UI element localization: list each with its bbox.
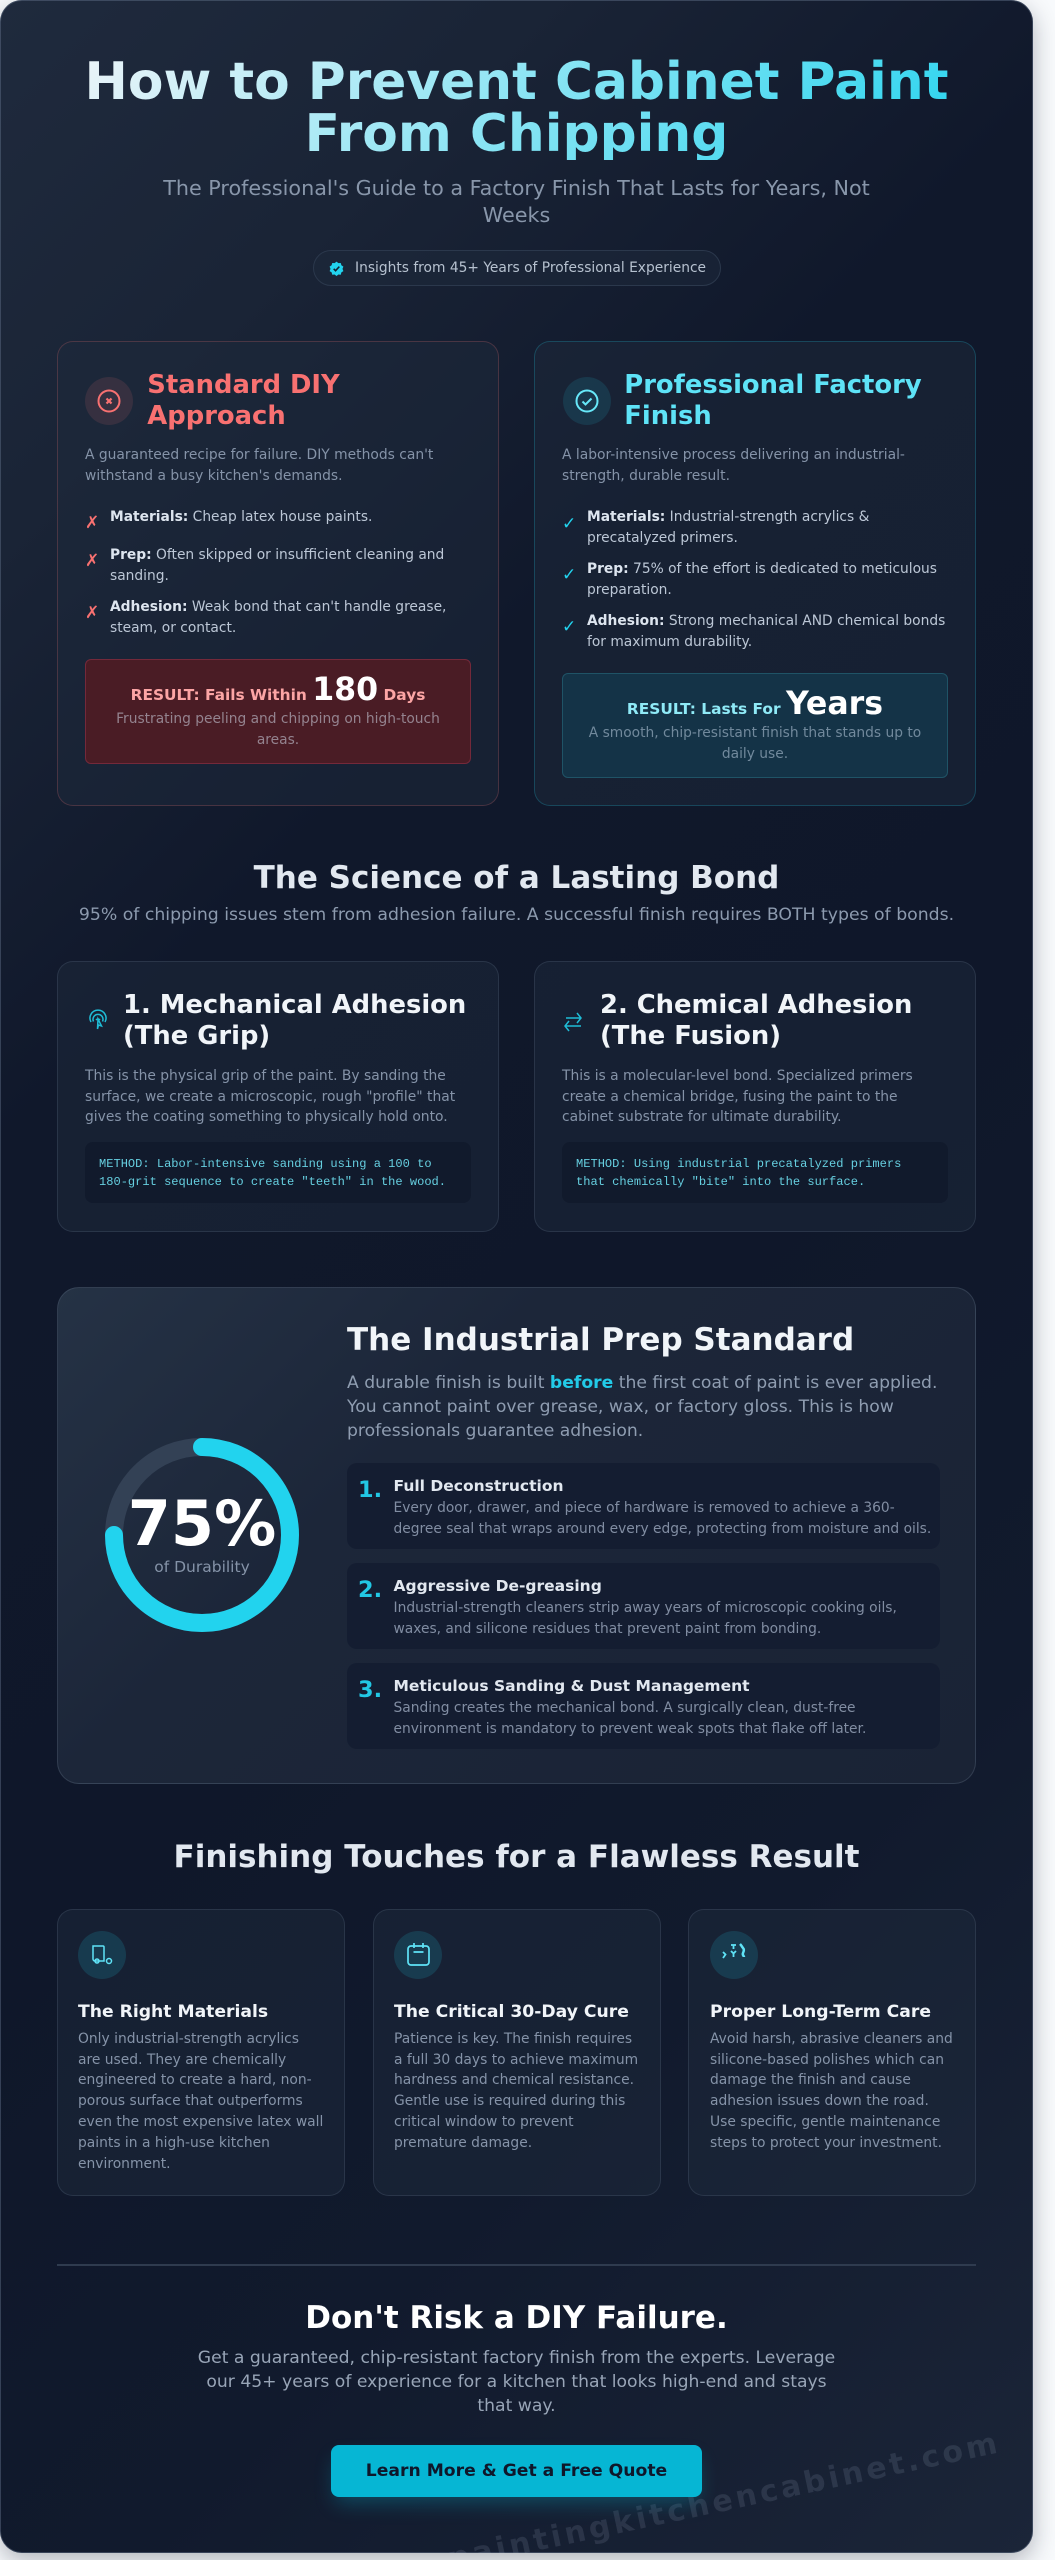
- icon: materials: [78, 1931, 126, 1979]
- heading: professional: Finish: [624, 400, 712, 430]
- step description: Every door, drawer, and piece of hardware is removed to achieve a 360-: [394, 1500, 895, 1516]
- panel: proper long-term care: [688, 1909, 976, 2196]
- card text: Use specific, gentle maintenance: [710, 2114, 940, 2130]
- title: [57, 56, 976, 160]
- list item: prep: Prep: Often skipped or insufficient cleaning and: [110, 547, 444, 563]
- heading: standard DIY: Approach: [147, 400, 286, 430]
- text: prep intro: A durable finish is built before the first coat of paint is ever applied.: [347, 1373, 937, 1393]
- step number: 3.: [358, 1677, 382, 1703]
- icon: verified check: [330, 262, 344, 276]
- result description: A smooth, chip-resistant finish that stands up to: [589, 725, 921, 741]
- button: learn more: Learn More & Get a Free Quote: [366, 2461, 667, 2481]
- card text: damage the finish and cause: [710, 2072, 911, 2088]
- card text: paints in a high-use kitchen: [78, 2135, 270, 2151]
- text: mechanical description: [84, 1068, 455, 1125]
- step title: Aggressive De-greasing: [394, 1577, 602, 1595]
- icon: swap arrows: [564, 1012, 582, 1032]
- code block: chemical method: [562, 1142, 948, 1203]
- list item: prep: [587, 561, 937, 598]
- button: learn more: [331, 2445, 702, 2497]
- list item: prep: Prep: 75% of the effort is dedicated to meticulous: [587, 561, 937, 577]
- step title: Meticulous Sanding & Dust Management: [394, 1677, 750, 1695]
- card text: even the most expensive latex wall: [78, 2114, 323, 2130]
- card text: adhesion issues down the road.: [710, 2093, 929, 2109]
- list item: materials: [587, 509, 869, 546]
- heading: chemical: 2. Chemical Adhesion: [600, 990, 912, 1020]
- panel: chemical adhesion: [534, 961, 976, 1232]
- text: professional intro: [562, 447, 905, 484]
- panel: standard DIY approach: [57, 341, 499, 806]
- icon: check in circle: [563, 377, 611, 425]
- card text: hardness and chemical resistance.: [394, 2072, 634, 2088]
- card text: steps to protect your investment.: [710, 2135, 942, 2151]
- result description: areas.: [257, 732, 299, 748]
- panel: the right materials: [57, 1909, 345, 2196]
- heading: call to action: Don't Risk a DIY Failure.: [305, 2300, 728, 2336]
- title: From Chipping: [305, 104, 728, 164]
- method text: 180-grit sequence to create "teeth" in the wood.: [99, 1175, 446, 1189]
- list item: adhesion: [110, 599, 446, 636]
- text: mechanical description: gives the coating something to physically hold onto.: [85, 1109, 448, 1125]
- card text: are used. They are chemically: [78, 2052, 286, 2068]
- card text: silicone-based polishes which can: [710, 2052, 944, 2068]
- text: professional intro: strength, durable result.: [562, 468, 730, 484]
- result description: [588, 725, 921, 762]
- text: chemical description: [562, 1068, 913, 1125]
- text: DIY intro: [85, 447, 433, 484]
- card text: Avoid harsh, abrasive cleaners and: [710, 2031, 953, 2047]
- icon: check: ✓: [562, 514, 576, 534]
- list item: adhesion: Adhesion: Weak bond that can't handle grease,: [110, 599, 446, 615]
- step description: environment is mandatory to prevent weak spots that flake off later.: [394, 1721, 866, 1737]
- card text: porous surface that outperforms: [78, 2093, 303, 2109]
- list item: adhesion: [587, 613, 945, 650]
- badge text: Insights from 45+ Years of Professional Experience: [355, 260, 706, 276]
- list item: adhesion: Adhesion: Strong mechanical AND chemical bonds: [587, 613, 945, 629]
- text: DIY intro: withstand a busy kitchen's demands.: [85, 468, 343, 484]
- heading: finishing touches: Finishing Touches for a Flawless Result: [174, 1839, 859, 1875]
- heading: mechanical: [123, 990, 466, 1050]
- text: call to action: our 45+ years of experience for a kitchen that looks high-end and stays: [206, 2372, 827, 2392]
- step description: Sanding creates the mechanical bond. A surgically clean, dust-free: [394, 1700, 856, 1716]
- card text: [78, 2031, 323, 2172]
- panel: the critical 30-day cure: [373, 1909, 661, 2196]
- heading: standard DIY: Standard DIY: [147, 370, 340, 400]
- step title: Full Deconstruction: [394, 1477, 564, 1495]
- result headline: RESULT: Fails Within 180 Days: [131, 672, 425, 708]
- title: How to Prevent Cabinet Paint: [85, 52, 948, 112]
- callout: professional result: [562, 673, 948, 778]
- card title: The Right Materials: [78, 2002, 268, 2022]
- method text: [576, 1157, 901, 1189]
- list item: materials: precatalyzed primers.: [587, 530, 738, 546]
- text: chemical description: This is a molecular-level bond. Specialized primers: [562, 1068, 913, 1084]
- method text: METHOD: Labor-intensive sanding using a 100 to: [99, 1157, 432, 1171]
- icon: cross: ✗: [85, 550, 99, 570]
- card text: Patience is key. The finish requires: [394, 2031, 632, 2047]
- panel: industrial prep standard: [57, 1287, 976, 1784]
- icon: cross: ✗: [85, 602, 99, 622]
- heading: mechanical: 1. Mechanical Adhesion: [123, 990, 466, 1020]
- heading: science section: The Science of a Lasting Bond: [254, 860, 779, 896]
- stat: 75 percent: 75%: [128, 1487, 276, 1560]
- text: call to action: [198, 2348, 835, 2416]
- step number: 2.: [358, 1577, 382, 1603]
- list item: prep: preparation.: [587, 582, 672, 598]
- icon: sparkle care: [710, 1931, 758, 1979]
- text: chemical description: create a chemical bridge, fusing the paint to the: [562, 1089, 898, 1105]
- heading: chemical: [600, 990, 912, 1050]
- card text: premature damage.: [394, 2135, 532, 2151]
- icon: cross: ✗: [85, 512, 99, 532]
- card text: environment.: [78, 2156, 171, 2172]
- card title: Proper Long-Term Care: [710, 2002, 931, 2022]
- card text: [394, 2031, 638, 2151]
- text: professional intro: A labor-intensive process delivering an industrial-: [562, 447, 905, 463]
- card text: a full 30 days to achieve maximum: [394, 2052, 638, 2068]
- step description: waxes, and silicone residues that prevent paint from bonding.: [394, 1621, 821, 1637]
- step number: 1.: [358, 1477, 382, 1503]
- icon: fingerprint pointer: [89, 1009, 107, 1030]
- icon: calendar: [394, 1931, 442, 1979]
- heading: chemical: (The Fusion): [600, 1020, 781, 1050]
- heading: professional: [624, 370, 922, 430]
- text: prep intro: professionals guarantee adhesion.: [347, 1421, 643, 1441]
- panel: professional factory finish: [534, 341, 976, 806]
- list item: prep: sanding.: [110, 568, 169, 584]
- step 2: [347, 1563, 940, 1649]
- step description: [394, 1700, 866, 1737]
- heading: industrial prep: The Industrial Prep Standard: [347, 1322, 854, 1358]
- card text: engineered to create a hard, non-: [78, 2072, 312, 2088]
- panel: mechanical adhesion: [57, 961, 499, 1232]
- subtitle: Weeks: [483, 203, 550, 227]
- step description: [394, 1600, 897, 1637]
- method text: METHOD: Using industrial precatalyzed primers: [576, 1157, 901, 1171]
- icon: check: ✓: [562, 616, 576, 636]
- heading: standard DIY: [147, 370, 340, 430]
- stat label: of Durability: [154, 1558, 250, 1576]
- chart: 75 percent donut: [105, 1438, 299, 1632]
- result headline: RESULT: Lasts For Years: [627, 686, 883, 722]
- text: call to action: that way.: [477, 2396, 556, 2416]
- text: chemical description: cabinet substrate for ultimate durability.: [562, 1109, 842, 1125]
- step 3: [347, 1663, 940, 1749]
- icon: x in circle: [85, 377, 133, 425]
- code block: mechanical method: [85, 1142, 471, 1203]
- text: prep intro: [347, 1373, 937, 1441]
- method text: that chemically "bite" into the surface.: [576, 1175, 865, 1189]
- card text: critical window to prevent: [394, 2114, 574, 2130]
- list item: adhesion: for maximum durability.: [587, 634, 752, 650]
- text: DIY intro: A guaranteed recipe for failure. DIY methods can't: [85, 447, 433, 463]
- list item: prep: [110, 547, 444, 584]
- text: mechanical description: This is the physical grip of the paint. By sanding the: [85, 1068, 446, 1084]
- card title: The Critical 30-Day Cure: [394, 2002, 629, 2022]
- card text: [710, 2031, 953, 2151]
- experience badge: [313, 250, 721, 286]
- step 1: [347, 1463, 940, 1549]
- result description: Frustrating peeling and chipping on high-touch: [116, 711, 440, 727]
- subtitle: [163, 176, 870, 227]
- subtitle: The Professional's Guide to a Factory Finish That Lasts for Years, Not: [163, 176, 870, 200]
- step description: Industrial-strength cleaners strip away years of microscopic cooking oils,: [394, 1600, 897, 1616]
- heading: mechanical: (The Grip): [123, 1020, 270, 1050]
- card text: Gentle use is required during this: [394, 2093, 625, 2109]
- text: prep intro: You cannot paint over grease, wax, or factory gloss. This is how: [347, 1397, 894, 1417]
- card text: Only industrial-strength acrylics: [78, 2031, 299, 2047]
- icon: check: ✓: [562, 564, 576, 584]
- text: science subtitle: 95% of chipping issues stem from adhesion failure. A successful finish requires BOTH types of bonds.: [79, 905, 954, 925]
- result description: daily use.: [722, 746, 788, 762]
- heading: professional: Professional Factory: [624, 370, 922, 400]
- result description: [116, 711, 440, 748]
- method text: [99, 1157, 446, 1189]
- step description: degree seal that wraps around every edge, protecting from moisture and oils.: [394, 1521, 931, 1537]
- text: mechanical description: surface, we create a microscopic, rough "profile" that: [85, 1089, 455, 1105]
- list item: materials: Materials: Cheap latex house paints.: [110, 509, 372, 525]
- step description: [394, 1500, 931, 1537]
- text: call to action: Get a guaranteed, chip-resistant factory finish from the experts. Leverage: [198, 2348, 835, 2368]
- callout: DIY result: [85, 659, 471, 764]
- list item: materials: Materials: Industrial-strength acrylics &: [587, 509, 869, 525]
- list item: adhesion: steam, or contact.: [110, 620, 236, 636]
